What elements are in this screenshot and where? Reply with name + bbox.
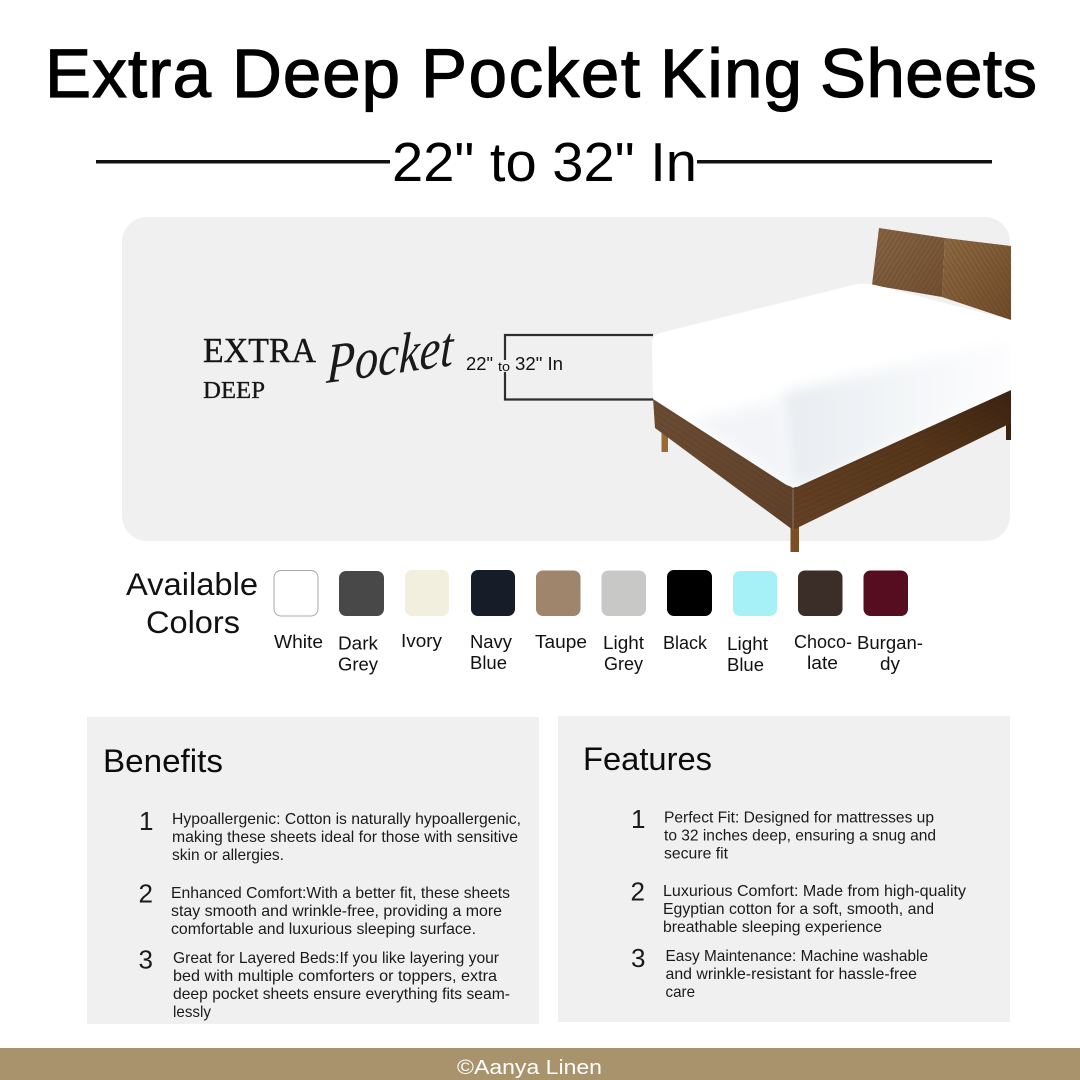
swatch: light blue: Light — [727, 633, 768, 654]
bed illustration — [650, 228, 1015, 552]
swatch: light blue — [727, 571, 777, 675]
swatch: taupe: Taupe — [535, 631, 587, 652]
swatch: chocolate — [794, 570, 852, 673]
swatch: chocolate: late — [807, 652, 838, 673]
depth bracket — [505, 335, 653, 400]
swatch: ivory: Ivory — [401, 630, 443, 651]
title — [45, 35, 1037, 112]
panel: benefits — [87, 717, 539, 1024]
benefit 2: 2 — [138, 878, 153, 908]
feature 2: breathable sleeping experience — [663, 919, 882, 936]
swatch: burgundy — [857, 570, 923, 674]
feature 2: Egyptian cotton for a soft, smooth, and — [663, 901, 934, 918]
benefit 1 — [139, 806, 521, 864]
subtitle with rules — [96, 131, 992, 193]
benefit 3 — [138, 944, 510, 1021]
feature 3: Easy Maintenance: Machine washable — [666, 948, 928, 965]
benefit 2 — [138, 878, 510, 938]
swatch: burgundy: Burgan- — [857, 632, 923, 653]
feature 1: 1 — [631, 804, 645, 834]
feature 2: Luxurious Comfort: Made from high-quality — [663, 883, 966, 900]
swatch: navy blue — [470, 570, 515, 673]
heading: features: Features — [583, 741, 712, 777]
title: Extra — [45, 35, 212, 112]
heading: extra deep: EXTRA — [203, 331, 317, 370]
title: Sheets — [820, 35, 1037, 112]
feature 1: to 32 inches deep, ensuring a snug and — [664, 828, 936, 844]
feature 3: 3 — [631, 943, 645, 973]
heading: available colors — [126, 566, 258, 640]
title: Deep — [232, 35, 400, 112]
feature 2 — [630, 876, 966, 936]
swatch: black: Black — [663, 632, 708, 653]
feature 1 — [631, 804, 936, 862]
footer bar: ©Aanya Linen — [457, 1056, 602, 1079]
heading: available colors: Available — [126, 566, 258, 602]
depth label: to — [498, 359, 510, 374]
swatch: navy blue: Blue — [470, 652, 507, 673]
feature 1: secure fit — [664, 846, 729, 862]
heading: available colors: Colors — [146, 604, 240, 640]
depth label: 32" In — [515, 354, 563, 374]
bed frame — [653, 389, 1011, 530]
swatch: light grey — [602, 570, 646, 674]
feature 3: care — [666, 984, 695, 1001]
feature 3: and wrinkle-resistant for hassle-free — [666, 966, 917, 983]
title: Pocket — [421, 35, 640, 112]
swatch: ivory — [401, 570, 449, 651]
swatch: light grey: Light — [603, 632, 644, 653]
benefit 1: 1 — [139, 806, 153, 836]
fitted white sheet — [650, 280, 1015, 492]
swatch: light blue: Blue — [727, 654, 764, 675]
swatch: navy blue: Navy — [470, 631, 513, 652]
footer bar — [0, 1048, 1080, 1080]
panel: features — [558, 716, 1010, 1022]
swatch: black — [663, 570, 712, 653]
benefit 1: making these sheets ideal for those with sensitive — [172, 829, 518, 846]
benefit 3: 3 — [138, 944, 153, 974]
benefit 3: Great for Layered Beds:If you like layering your — [173, 950, 500, 967]
swatch: taupe — [535, 570, 587, 652]
subtitle with rules: 22" to 32" In — [392, 131, 697, 193]
feature 3 — [631, 943, 928, 1001]
swatch: white — [274, 570, 323, 652]
color swatches — [274, 570, 923, 675]
swatch: dark grey: Grey — [338, 654, 379, 674]
benefit 2: stay smooth and wrinkle-free, providing a more — [171, 903, 502, 920]
heading: extra deep: DEEP — [203, 378, 265, 404]
feature 2: 2 — [630, 876, 645, 906]
benefit 1: Hypoallergenic: Cotton is naturally hypoallergenic, — [172, 811, 521, 828]
bed legs — [662, 421, 1011, 552]
benefit 3: bed with multiple comforters or toppers, extra — [173, 968, 497, 985]
heading: extra deep — [203, 331, 317, 404]
panel: hero diagram — [122, 217, 1015, 552]
swatch: burgundy: dy — [880, 653, 901, 674]
swatch: dark grey — [338, 571, 384, 674]
feature 1: Perfect Fit: Designed for mattresses up — [664, 810, 934, 826]
benefit 3: lessly — [173, 1004, 211, 1021]
depth label — [466, 354, 563, 374]
script word: pocket: Pocket — [325, 316, 456, 396]
heading: benefits: Benefits — [103, 743, 223, 779]
benefit 2: Enhanced Comfort:With a better fit, these sheets — [171, 885, 510, 902]
benefit 2: comfortable and luxurious sleeping surface. — [171, 921, 476, 938]
swatch: white: White — [274, 631, 323, 652]
swatch: light grey: Grey — [604, 653, 644, 674]
swatch: dark grey: Dark — [338, 632, 379, 654]
benefit 1: skin or allergies. — [172, 847, 284, 864]
headboard — [872, 228, 1011, 320]
title: King — [660, 35, 802, 112]
benefit 3: deep pocket sheets ensure everything fits seam- — [173, 986, 510, 1003]
depth label: 22" — [466, 354, 493, 374]
swatch: chocolate: Choco- — [794, 631, 852, 652]
